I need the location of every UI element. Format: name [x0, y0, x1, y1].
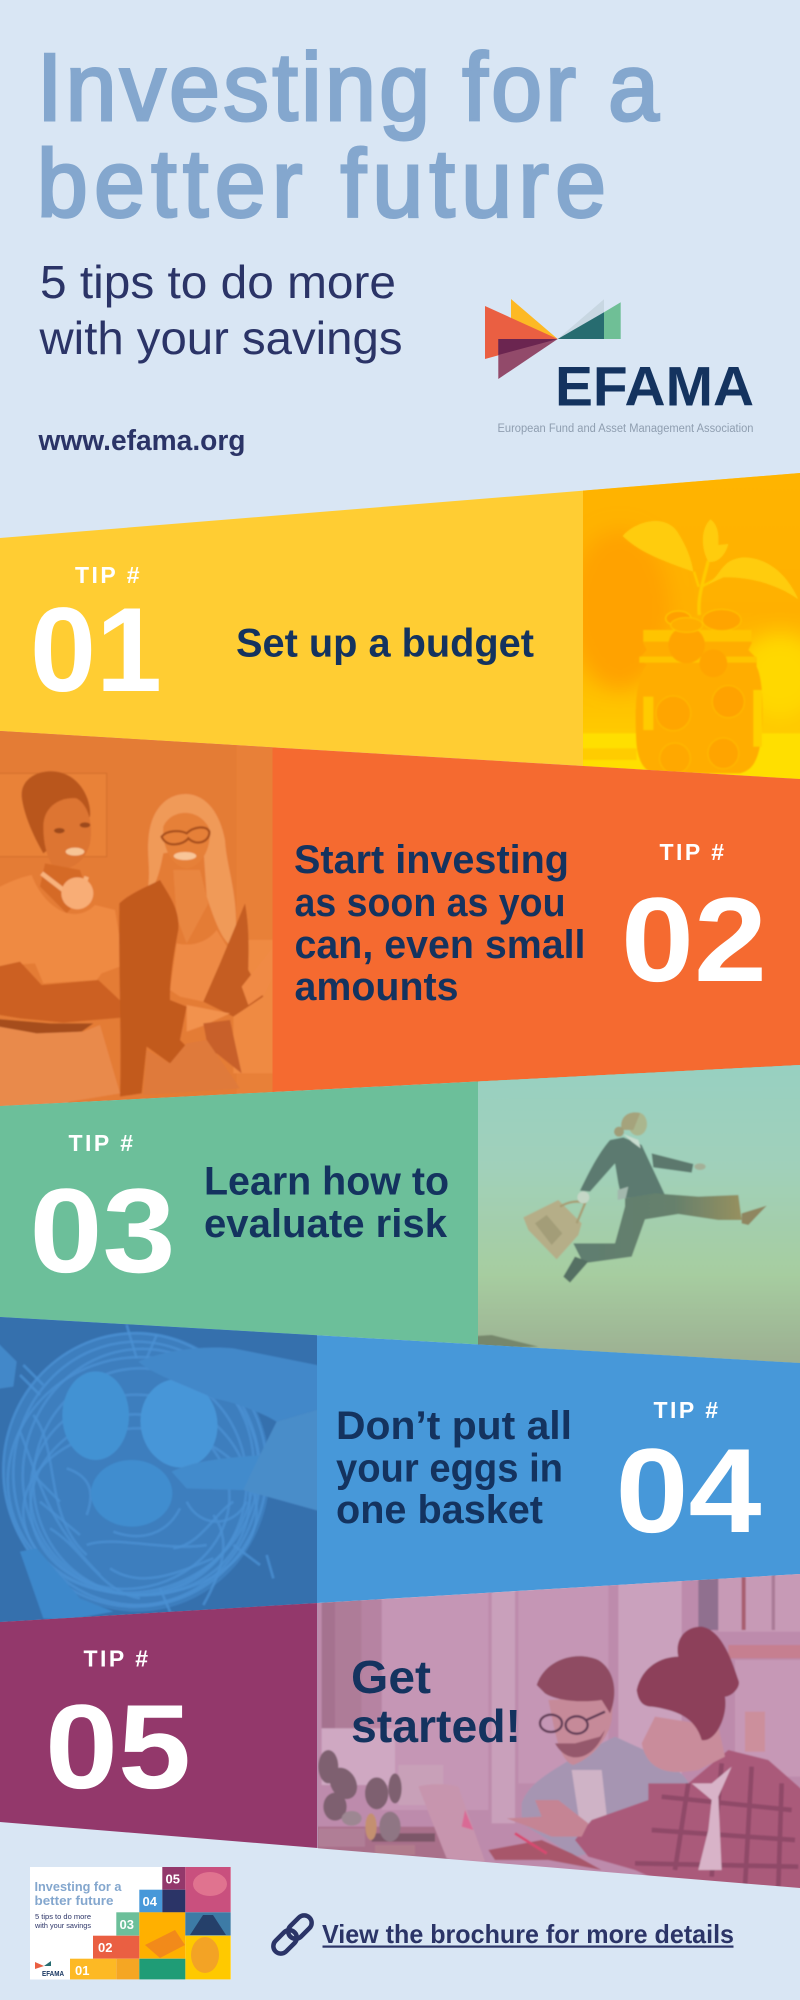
- tip text: amounts: [294, 965, 458, 1009]
- photo: two smiling young women: [0, 731, 272, 1106]
- tip text: can, even small: [294, 923, 586, 967]
- photo: businesswoman leaping with handbag: [478, 1065, 800, 1363]
- tip number: 04: [616, 1424, 762, 1558]
- thumbnail numbers: 01: [75, 1963, 89, 1978]
- band: tip 3 background: [0, 1065, 800, 1363]
- tip text: [336, 1404, 572, 1532]
- band: tip 1 background: [0, 473, 800, 779]
- brochure thumbnail: [30, 1867, 231, 1980]
- band: tip 5 background: [0, 1603, 318, 1848]
- logo: EFAMA: [485, 299, 754, 435]
- title: better future: [37, 130, 606, 237]
- tip text: evaluate risk: [204, 1202, 448, 1246]
- thumbnail subtitle: with your savings: [34, 1923, 92, 1930]
- tip number: 05: [45, 1680, 191, 1814]
- subtitle: [38, 256, 403, 364]
- thumbnail numbers: 02: [98, 1940, 112, 1955]
- tip text: your eggs in: [336, 1446, 563, 1490]
- logo wordmark: EFAMA: [555, 355, 754, 418]
- thumbnail logo: [35, 1961, 64, 1978]
- panel: tip 2: [0, 720, 800, 1120]
- tip number: 02: [621, 873, 767, 1007]
- thumbnail title: [34, 1880, 123, 1908]
- tip label: TIP #: [654, 1397, 718, 1423]
- title: [37, 33, 660, 237]
- icon: chain link: [270, 1912, 315, 1957]
- thumbnail numbers: 05: [166, 1872, 180, 1886]
- tip text: Start investing: [294, 838, 569, 882]
- link: view the brochure: View the brochure for more details: [322, 1919, 734, 1949]
- thumbnail subtitle: [34, 1914, 92, 1930]
- tip label: TIP #: [68, 1130, 133, 1156]
- tip text: as soon as you: [294, 881, 566, 925]
- band: tip 2 background: [0, 731, 800, 1106]
- tip text: [294, 838, 586, 1009]
- thumbnail title: Investing for a: [34, 1880, 123, 1894]
- thumbnail steps and photos: [70, 1867, 231, 1979]
- tip label: TIP #: [660, 839, 724, 865]
- tip number: 03: [30, 1164, 176, 1298]
- tip label: TIP #: [75, 562, 140, 588]
- thumbnail numbers: 04: [142, 1894, 158, 1909]
- tip text: [204, 1160, 449, 1246]
- panel: tip 1: [0, 460, 800, 795]
- icon: logo butterfly mark: [485, 299, 621, 379]
- tip text: Set up a budget: [236, 622, 534, 666]
- tip text: Don’t put all: [336, 1404, 572, 1448]
- thumbnail numbers: [75, 1872, 180, 1978]
- tip text: [351, 1651, 521, 1752]
- tip text: one basket: [336, 1488, 543, 1532]
- title: Investing for a: [37, 33, 660, 141]
- thumbnail logo: EFAMA: [42, 1971, 64, 1978]
- tip text: Get: [351, 1651, 431, 1703]
- logo tagline: European Fund and Asset Management Association: [498, 423, 754, 435]
- panel: tip 4: [0, 1305, 800, 1635]
- photo: hands and eggs in a nest: [0, 1317, 317, 1622]
- panel: tip 5: [0, 1560, 800, 1900]
- band: tip 4 background: [0, 1317, 800, 1622]
- tip label: TIP #: [84, 1646, 148, 1672]
- website url: www.efama.org: [38, 425, 246, 457]
- thumbnail subtitle: 5 tips to do more: [35, 1914, 91, 1921]
- tip text: Learn how to: [204, 1160, 449, 1204]
- subtitle: with your savings: [38, 312, 403, 364]
- panel: tip 3: [0, 1050, 800, 1380]
- thumbnail title: better future: [34, 1894, 114, 1908]
- tip number: 01: [30, 583, 162, 717]
- tip text: started!: [351, 1700, 521, 1752]
- photo: couple looking at a laptop: [318, 1574, 800, 1888]
- subtitle: 5 tips to do more: [40, 256, 396, 308]
- thumbnail numbers: 03: [120, 1917, 134, 1932]
- photo: plant growing from jar of coins: [583, 473, 800, 779]
